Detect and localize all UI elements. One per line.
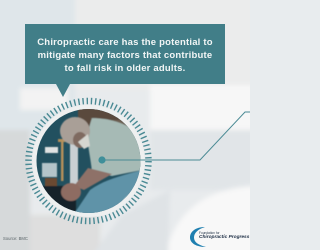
faded background photo	[0, 0, 255, 250]
connector dot	[98, 156, 106, 164]
callout bubble	[25, 24, 225, 97]
logo wordmark: Foundation for	[199, 230, 220, 234]
tick ring	[28, 101, 148, 221]
logo: Foundation for Chiropractic Progress	[190, 227, 250, 247]
logo wordmark	[199, 230, 250, 240]
callout text: Chiropractic care has the potential to	[37, 37, 213, 48]
connector line	[102, 112, 250, 160]
logo arc	[190, 227, 206, 247]
illustration: background, photo, ring and connector	[0, 0, 250, 250]
circular photo: older man on bed	[36, 106, 144, 214]
source note: Source: BMC	[3, 236, 28, 241]
white halo around photo	[32, 105, 144, 217]
callout text: mitigate many factors that contribute	[38, 50, 212, 61]
logo wordmark: Chiropractic Progress	[199, 235, 249, 240]
callout text: to fall risk in older adults.	[65, 63, 185, 74]
